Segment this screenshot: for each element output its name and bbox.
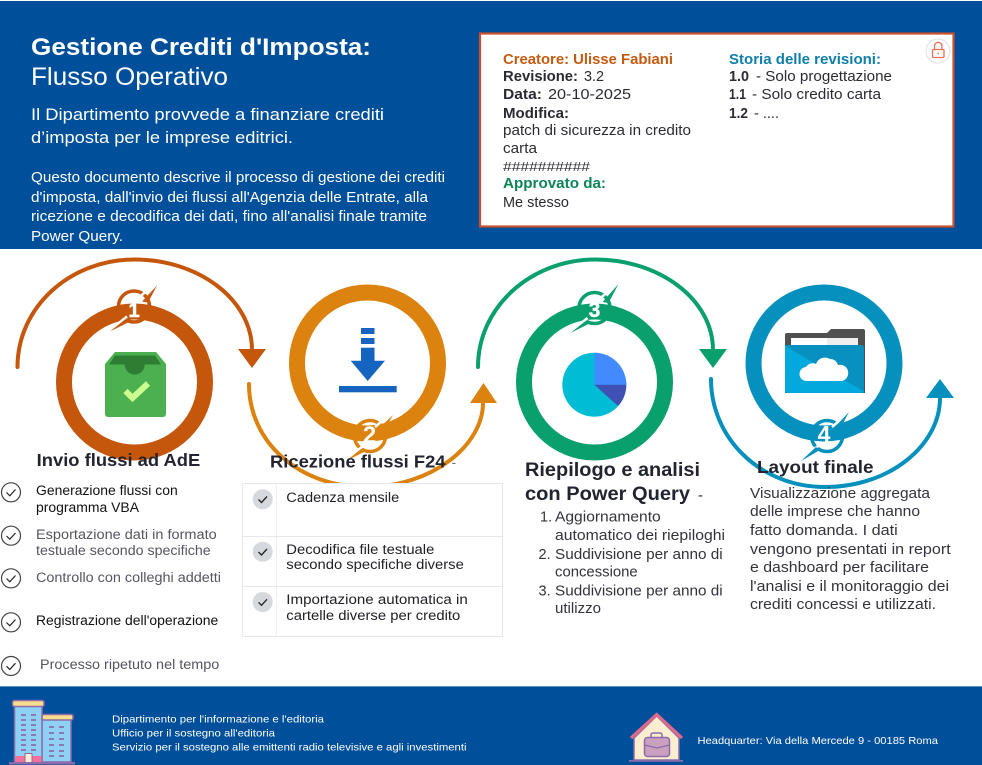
creator and revision details xyxy=(503,52,691,211)
numbered list: step 3: utilizzo xyxy=(555,601,601,617)
item: generation xyxy=(2,483,178,515)
creator and revision details: Modifica: xyxy=(503,106,569,122)
title: Gestione Crediti d'Imposta: xyxy=(31,34,371,61)
numbered list: step 3: 2. xyxy=(538,547,551,563)
numbered list: step 3: Aggiornamento xyxy=(555,510,661,526)
revision history xyxy=(729,52,892,122)
panel: step 2 table xyxy=(242,484,502,636)
heading: step 4: Layout finale xyxy=(757,457,874,477)
item: repeat: Processo ripetuto nel tempo xyxy=(40,657,219,672)
row: automatic import xyxy=(253,592,468,623)
revision history: - Solo credito carta xyxy=(752,87,882,103)
creator and revision details: carta xyxy=(503,141,538,157)
badge: step 4: 4 xyxy=(818,421,831,447)
item: control xyxy=(2,569,221,588)
header band xyxy=(0,1,982,249)
paragraph: step 4: fatto domanda. I dati xyxy=(750,523,898,539)
numbered list: step 3: automatico dei riepiloghi xyxy=(555,528,725,544)
revision history: 1.0 xyxy=(729,69,749,85)
icon: lock xyxy=(926,39,950,63)
paragraph: step 4 xyxy=(750,486,951,613)
item: registration: Registrazione dell'operazione xyxy=(36,613,218,628)
heading: step 1: Invio flussi ad AdE xyxy=(37,450,200,470)
numbered list: step 3: Suddivisione per anno di xyxy=(555,584,723,600)
step 1 ring xyxy=(64,312,205,452)
row: file decoding: Decodifica file testuale xyxy=(286,542,434,557)
arrow: step 4 arc xyxy=(711,379,954,487)
item: export xyxy=(2,526,217,558)
creator and revision details: Me stesso xyxy=(503,195,569,211)
row: file decoding xyxy=(253,542,464,572)
badge: step 3: 3 xyxy=(589,299,600,322)
creator and revision details: Approvato da: xyxy=(503,176,606,192)
item: export: testuale secondo specifiche xyxy=(36,543,211,558)
footer band xyxy=(0,686,982,765)
paragraph: step 4: l'analisi e il monitoraggio dei xyxy=(750,579,949,595)
intro paragraph: ricezione e decodifica dei dati, fino all'analisi finale tramite xyxy=(31,209,427,225)
item: export: Esportazione dati in formato xyxy=(36,527,217,542)
item: control: Controllo con colleghi addetti xyxy=(36,570,221,585)
paragraph: step 4: delle imprese che hanno xyxy=(750,504,920,520)
heading: step 2: Ricezione flussi F24 xyxy=(270,452,446,472)
badge: step 4 xyxy=(801,412,849,461)
icon: download arrow xyxy=(339,328,397,392)
checklist: step 1 xyxy=(2,483,221,676)
item: generation: programma VBA xyxy=(36,500,139,515)
revision history: 1.1 xyxy=(729,87,746,103)
icon: cloud folder xyxy=(785,329,865,393)
heading: step 3: con Power Query xyxy=(525,484,690,505)
creator and revision details: Revisione: xyxy=(503,69,578,85)
icon: office buildings xyxy=(9,700,75,764)
icon: green inbox box with check xyxy=(105,352,166,417)
subtitle: d’imposta per le imprese editrici. xyxy=(31,128,293,147)
badge: step 2 xyxy=(346,414,393,461)
heading: step 3: - xyxy=(698,487,703,504)
title: Flusso Operativo xyxy=(31,63,228,91)
revision history: 1.2 xyxy=(729,106,748,122)
creator and revision details: patch di sicurezza in credito xyxy=(503,123,691,139)
revision history: - Solo progettazione xyxy=(756,69,892,85)
intro paragraph xyxy=(31,170,445,245)
arrow: step 1 arc xyxy=(18,260,266,368)
paragraph: step 4: crediti concessi e utilizzati. xyxy=(750,597,936,613)
row: file decoding: secondo specifiche diverse xyxy=(286,557,464,572)
icon: headquarters house xyxy=(629,714,683,762)
footer address: Headquarter: Via della Mercede 9 - 00185 Roma xyxy=(698,735,938,747)
item: generation: Generazione flussi con xyxy=(36,483,178,498)
creator and revision details: Creatore: Ulisse Fabiani xyxy=(503,52,673,68)
heading: step 3 xyxy=(525,460,703,505)
badge: step 1 xyxy=(110,284,157,332)
row: automatic import: cartelle diverse per credito xyxy=(286,608,460,623)
paragraph: step 4: vengono presentati in report xyxy=(750,542,951,558)
arrow: step 3 arc xyxy=(478,260,727,368)
heading: step 2: - xyxy=(452,454,456,470)
heading: step 3: Riepilogo e analisi xyxy=(525,460,700,481)
title xyxy=(31,34,371,91)
intro paragraph: Power Query. xyxy=(31,229,123,245)
badge: step 2: 2 xyxy=(363,422,376,449)
creator and revision details: ########## xyxy=(503,160,590,174)
creator and revision details: 20-10-2025 xyxy=(548,87,631,103)
paragraph: step 4: Visualizzazione aggregata xyxy=(750,486,931,502)
subtitle: Il Dipartimento provvede a finanziare crediti xyxy=(31,105,384,124)
step 4 ring xyxy=(754,292,894,434)
revision history: Storia delle revisioni: xyxy=(729,52,881,68)
arrow: step 2 arc xyxy=(249,383,497,487)
intro paragraph: d'imposta, dall'invio dei flussi all'Agenzia delle Entrate, alla xyxy=(31,190,429,206)
numbered list: step 3: 1. xyxy=(540,510,552,526)
subtitle xyxy=(31,105,384,147)
numbered list: step 3: Suddivisione per anno di xyxy=(555,547,723,563)
footer department text: Servizio per il sostegno alle emittenti radio televisive e agli investimenti xyxy=(112,742,466,754)
creator and revision details: 3.2 xyxy=(584,69,604,85)
creator and revision details: Data: xyxy=(503,87,542,103)
item: repeat xyxy=(2,656,219,676)
step 2 ring xyxy=(297,292,438,434)
footer department text: Dipartimento per l'informazione e l'editoria xyxy=(112,714,324,726)
badge: step 3 xyxy=(570,284,618,333)
intro paragraph: Questo documento descrive il processo di gestione dei crediti xyxy=(31,170,445,186)
row: monthly cadence: Cadenza mensile xyxy=(286,490,399,505)
badge: step 1: 1 xyxy=(128,300,140,322)
row: monthly cadence xyxy=(253,489,399,509)
panel: document info xyxy=(480,34,954,226)
numbered list: step 3: 3. xyxy=(538,584,551,600)
footer department text: Ufficio per il sostegno all'editoria xyxy=(112,728,275,740)
item: registration xyxy=(2,613,218,632)
numbered list: step 3: concessione xyxy=(555,565,638,581)
paragraph: step 4: e dashboard per facilitare xyxy=(750,560,929,576)
row: automatic import: Importazione automatica in xyxy=(286,592,468,607)
revision history: - .... xyxy=(754,106,779,122)
step 3 ring xyxy=(524,312,665,452)
numbered list: step 3 xyxy=(538,510,725,617)
footer department text xyxy=(112,714,466,754)
icon: pie chart xyxy=(562,353,626,417)
